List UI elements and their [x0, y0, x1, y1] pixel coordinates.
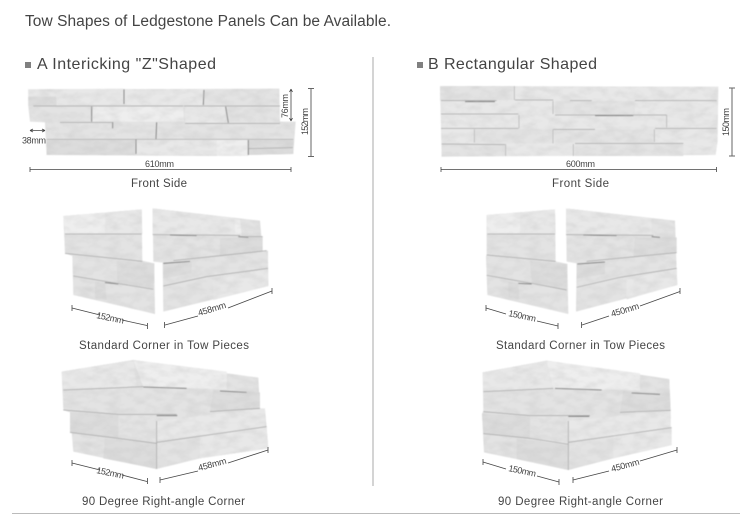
stone: A corner pieces	[63, 208, 268, 314]
title: Tow Shapes of Ledgestone Panels Can be Available.	[25, 13, 391, 30]
stone: A 90 degree corner	[62, 360, 268, 469]
dimensions: A 90 degree corner: 152mm	[96, 465, 125, 481]
divider between A and B	[372, 57, 374, 486]
dimensions: B 90 degree corner: 450mm	[610, 457, 641, 474]
caption: Standard Corner in Tow Pieces	[496, 340, 665, 352]
dimensions: B front: 600mm	[566, 159, 595, 169]
dimensions: A corner pieces: 458mm	[197, 300, 227, 318]
caption: Front Side	[131, 178, 187, 190]
dimensions: B 90 degree corner: 150mm	[508, 463, 537, 479]
dimensions: B 90 degree corner	[483, 447, 677, 485]
panel: A Z-shaped	[22, 56, 314, 508]
dimensions: A front: 152mm	[300, 108, 310, 135]
dimensions: A front	[22, 88, 314, 172]
caption: 90 Degree Right-angle Corner	[82, 496, 245, 508]
dimensions: A 90 degree corner	[72, 447, 268, 484]
bottom rule	[12, 513, 740, 514]
stone: B corner pieces	[486, 208, 677, 314]
dimensions: B corner pieces: 450mm	[610, 301, 640, 319]
heading: A: A Intericking "Z"Shaped	[37, 56, 216, 73]
dimensions: A front: 610mm	[145, 159, 174, 169]
dimensions: B corner pieces: 150mm	[508, 308, 537, 324]
caption: 90 Degree Right-angle Corner	[498, 496, 663, 508]
panel: B rectangular	[417, 56, 735, 508]
stone panel: A front	[28, 89, 296, 156]
caption: Front Side	[552, 178, 609, 190]
caption: Standard Corner in Tow Pieces	[79, 340, 249, 352]
dimensions: A corner pieces: 152mm	[96, 310, 125, 326]
heading: B: B Rectangular Shaped	[428, 56, 597, 73]
dimensions: A front: 76mm	[280, 94, 290, 118]
dimensions: B corner pieces	[486, 288, 680, 329]
dimensions: A 90 degree corner: 458mm	[197, 456, 228, 473]
stone: B 90 degree corner	[482, 361, 672, 470]
dimensions: A front: 38mm	[22, 136, 46, 146]
dimensions: A corner pieces	[72, 288, 272, 329]
stone panel: B front	[440, 86, 718, 157]
dimensions: B front	[441, 88, 735, 172]
dimensions: B front: 150mm	[721, 108, 731, 136]
